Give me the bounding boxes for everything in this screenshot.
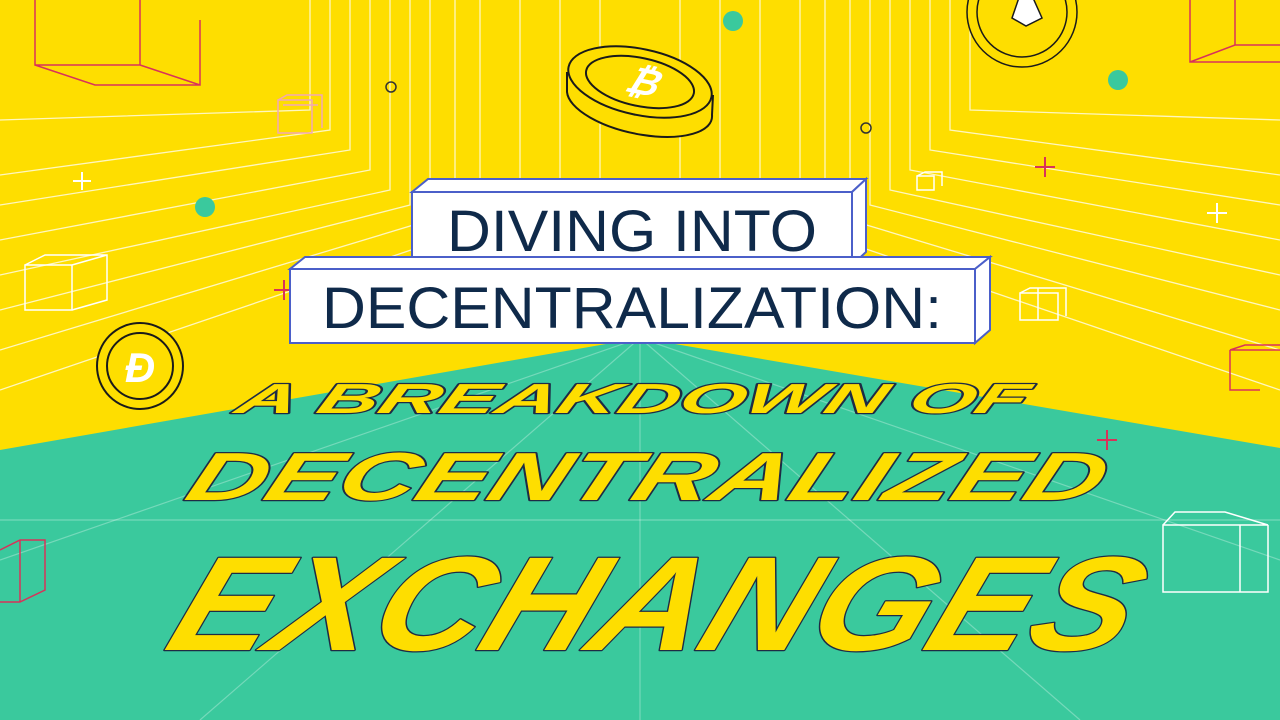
green floor [0, 338, 1280, 720]
icon: ethereum coin [967, 0, 1077, 67]
title box 1 [412, 179, 866, 265]
icon: dogecoin [97, 323, 183, 409]
title box 2 [290, 257, 990, 343]
subtitle: EXCHANGES [151, 530, 1166, 679]
title box 2: DECENTRALIZATION: [322, 276, 942, 341]
title box 1: DIVING INTO [447, 199, 817, 264]
dots [723, 11, 743, 31]
icon: bitcoin coin [562, 35, 718, 137]
icon: bitcoin coin: ₿ [618, 60, 673, 105]
subtitle: A BREAKDOWN OF [228, 376, 1039, 423]
subtitle [151, 376, 1166, 679]
subtitle: DECENTRALIZED [177, 438, 1120, 515]
icon: dogecoin: Ð [125, 344, 155, 391]
